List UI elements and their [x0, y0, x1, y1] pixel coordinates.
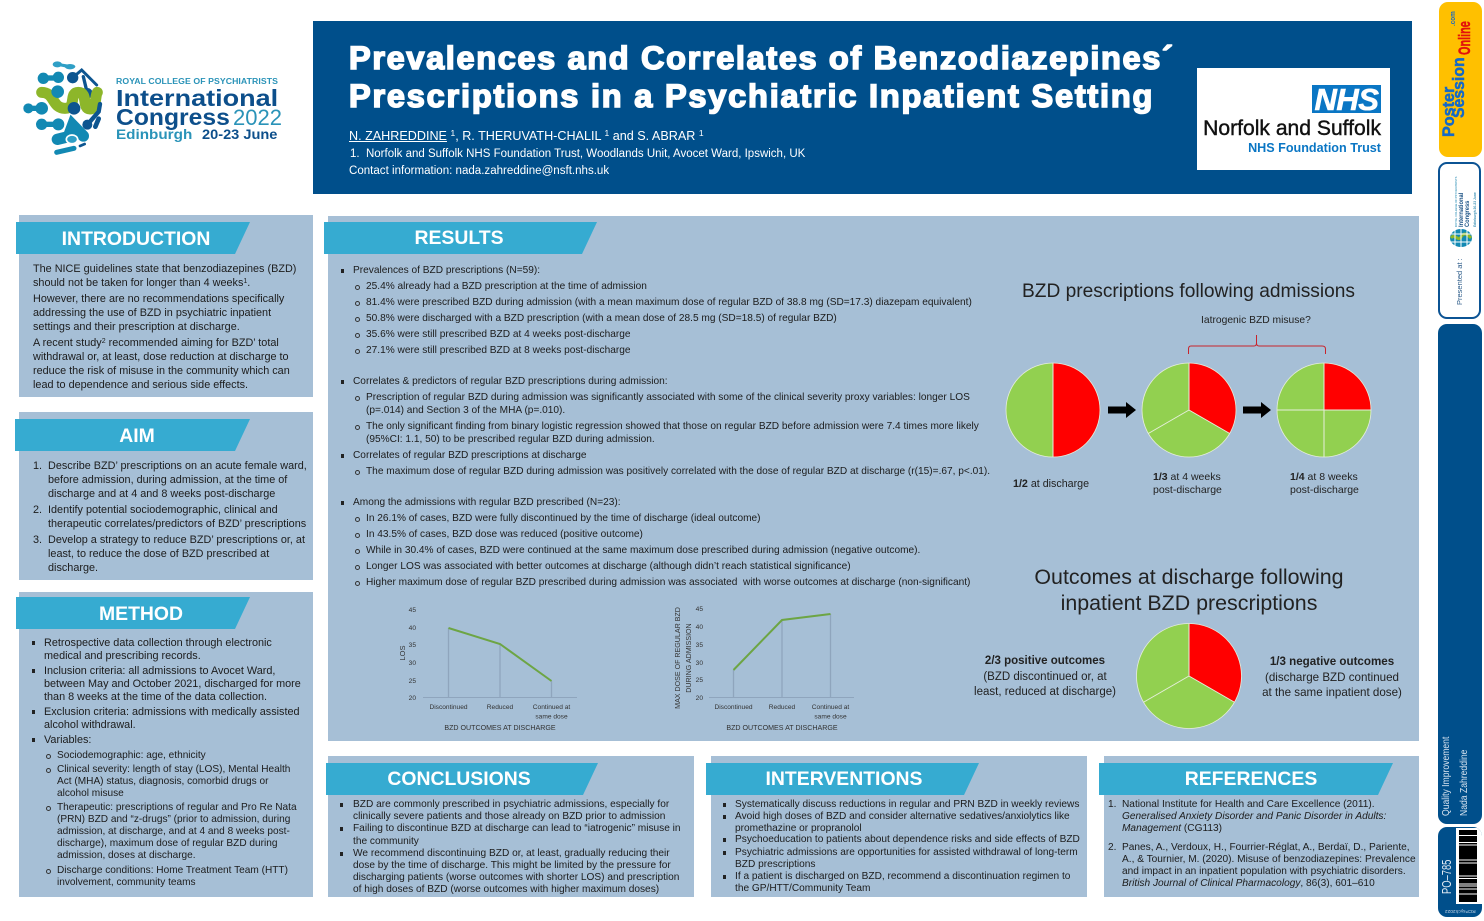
line chart: LOS by outcome: same dose: [535, 714, 568, 720]
pie label: one quarter: 1/4 at 8 weeks: [1290, 471, 1358, 483]
arrow: [1243, 402, 1271, 418]
line chart: LOS by outcome: 35: [409, 642, 416, 649]
results text: Prevalences of BZD prescriptions (N=59):: [353, 265, 540, 276]
vertical word: Session: Session: [1449, 57, 1468, 118]
results text: Correlates of regular BZD prescriptions at discharge: [353, 450, 587, 461]
pie label: one third: post-discharge: [1153, 484, 1222, 496]
results text: The only significant finding from binary logistic regression showed that those on regular BZD before admission were 7.4 times more likely: [366, 421, 979, 432]
aim list: before admission, during admission, at the time of: [48, 474, 287, 486]
conference logo: [23, 61, 282, 155]
method list: admission, doses at discharge.: [57, 850, 196, 861]
logo text: Congress: [116, 104, 230, 130]
label: negative outcomes: at the same inpatient dose): [1262, 686, 1402, 699]
heading: aim: [15, 419, 250, 451]
results text: 50.8% were discharged with a BZD prescription (with a mean dose of 28.5 mg (SD=18.5) of regular BZD): [366, 313, 837, 324]
conclusions list: the community: [353, 836, 419, 847]
interventions list: the GP/HTT/Community Team: [735, 883, 870, 894]
references list: National Institute for Health and Care Excellence (2011).: [1122, 799, 1375, 810]
heading: interventions: INTERVENTIONS: [766, 768, 922, 790]
mini congress text: [1454, 176, 1477, 227]
title banner: [313, 21, 1412, 194]
label: iatrogenic misuse: Iatrogenic BZD misuse?: [1201, 315, 1311, 326]
logo text: 2022: [233, 105, 282, 130]
pie: one third at four weeks: [1142, 362, 1236, 458]
pie: outcomes at discharge: [1136, 623, 1242, 729]
line chart: max dose by outcome: DURING ADMISSION: [685, 623, 693, 693]
line chart: max dose by outcome: Reduced: [769, 704, 796, 711]
conclusions list: of high doses of BZD (worse outcomes with higher maximum doses): [353, 884, 659, 895]
method list: Therapeutic: prescriptions of regular and Pro Re Nata: [57, 802, 297, 813]
aim list: therapeutic correlates/predictors of BZD’ prescriptions: [48, 518, 306, 530]
interventions list: promethazine or propranolol: [735, 823, 862, 834]
panel: conclusions: [328, 756, 694, 897]
method list: discharge), maximum dose of regular BZD during: [57, 838, 277, 849]
pie label: one third: [1153, 471, 1222, 496]
pie: one quarter at eight weeks: [1276, 362, 1372, 458]
heading: aim: AIM: [119, 425, 155, 447]
affiliation: 1. Norfolk and Suffolk NHS Foundation Trust, Woodlands Unit, Avocet Ward, Ipswich, UK: [350, 148, 805, 160]
heading: results: [324, 222, 597, 254]
interventions list: Psychoeducation to patients about dependence risks and side effects of BZD: [735, 834, 1080, 845]
label: positive outcomes: least, reduced at discharge): [974, 686, 1116, 698]
introduction text: settings and their prescription at discharge.: [33, 321, 240, 333]
aim list: least, to reduce the dose of BZD prescribed at: [48, 548, 269, 560]
conclusions list: [340, 799, 681, 895]
mini congress text: Edinburgh 20-23 June: [1473, 192, 1477, 227]
category text: Quality Improvement: [1441, 737, 1452, 816]
sidebar: poster number tab: [1438, 827, 1482, 917]
references list: A., & Tournier, M. (2020). Misuse of benzodiazepines: Prevalence: [1122, 854, 1416, 865]
interventions list: BZD prescriptions: [735, 859, 815, 870]
line chart: LOS by outcome: BZD OUTCOMES AT DISCHARGE: [444, 724, 556, 732]
heading: introduction: INTRODUCTION: [62, 228, 210, 250]
heading: conclusions: CONCLUSIONS: [387, 768, 531, 790]
foundation trust line: NHS Foundation Trust: [1248, 141, 1381, 155]
method list: Discharge conditions: Home Treatment Team (HTT): [57, 865, 288, 876]
line chart: max dose by outcome: Discontinued: [714, 704, 753, 711]
heading: references: [1099, 763, 1393, 795]
conclusions list: Failing to discontinue BZD at discharge can lead to “iatrogenic” misuse in: [353, 823, 681, 834]
mini congress text: International: [1459, 193, 1465, 227]
panel: aim: [19, 412, 313, 580]
line chart: LOS by outcome: LOS: [398, 645, 407, 661]
method list: medical and prescribing records.: [44, 650, 201, 662]
mini congress text: ROYAL COLLEGE OF PSYCHIATRISTS: [1454, 177, 1458, 227]
results text: In 43.5% of cases, BZD dose was reduced (positive outcome): [366, 529, 643, 540]
title: Prevalences and Correlates of Benzodiazepines´: [349, 40, 1174, 76]
presenter name: Nada Zahreddine: [1459, 750, 1470, 816]
results text: Correlates & predictors of regular BZD prescriptions during admission:: [353, 376, 668, 387]
line chart: max dose by outcome: BZD OUTCOMES AT DISCHARGE: [726, 724, 838, 732]
heading: interventions: [706, 763, 979, 795]
panel: aim: 1.: [33, 460, 42, 472]
line chart: LOS by outcome: 30: [409, 660, 416, 667]
line chart: max dose by outcome: Continued at: [812, 704, 849, 711]
references list: [1108, 799, 1416, 889]
interventions list: Avoid high doses of BZD and consider alternative sedatives/anxiolytics like: [735, 811, 1070, 822]
aim list: discharge and at 4 and 8 weeks post-discharge: [48, 488, 275, 500]
panel: references: 1.: [1108, 799, 1116, 810]
heading: outcomes at discharge: Outcomes at discharge following: [1034, 565, 1344, 589]
line chart: max dose by outcome: same dose: [814, 714, 847, 720]
line chart: max dose by outcome: [674, 606, 854, 732]
method list: involvement, community teams: [57, 877, 196, 888]
conclusions list: clinically severe patients and those already on BZD prior to admission: [353, 811, 665, 822]
panel: aim: 3.: [33, 534, 42, 546]
pie label: one quarter: [1290, 471, 1359, 496]
authors: N. ZAHREDDINE 1, R. THERUVATH-CHALIL 1 and S. ABRAR 1: [349, 128, 704, 143]
aim list: Describe BZD’ prescriptions on an acute female ward,: [48, 460, 307, 472]
introduction text: However, there are no recommendations specifically: [33, 293, 284, 305]
line chart: max dose by outcome: 45: [696, 606, 703, 613]
panel: aim: 2.: [33, 504, 42, 516]
label: positive outcomes: [974, 655, 1116, 698]
method list: Inclusion criteria: all admissions to Avocet Ward,: [44, 665, 275, 677]
contact: Contact information: nada.zahreddine@nsft.nhs.uk: [349, 165, 609, 177]
logo mark: molecule globe: [23, 61, 103, 155]
line chart: max dose by outcome: 20: [696, 695, 703, 702]
panel: references: 2.: [1108, 842, 1116, 853]
interventions list: Systematically discuss reductions in regular and PRN BZD in weekly reviews: [735, 799, 1079, 810]
interventions list: Psychiatric admissions are opportunities for assisted withdrawal of long-term: [735, 847, 1078, 858]
results text: In 26.1% of cases, BZD were fully discontinued by the time of discharge (ideal outcome): [366, 513, 761, 524]
introduction text: lead to dependence and serious side effects.: [33, 379, 248, 391]
arrow: [1108, 402, 1136, 418]
references list: and impact in an inpatient population with psychiatric disorders.: [1122, 866, 1406, 877]
presented at label: Presented at :: [1455, 258, 1464, 305]
conclusions list: discharging patients (worse outcomes with shorter LOS) and prescription: [353, 872, 679, 883]
interventions list: [723, 799, 1080, 894]
results text: 27.1% were still prescribed BZD at 8 weeks post-discharge: [366, 345, 630, 356]
results text: (p=.014) and Section 3 of the MHA (p=.010).: [366, 405, 565, 416]
label: negative outcomes: (discharge BZD continued: [1265, 670, 1399, 684]
title: [349, 40, 1174, 114]
results text: 35.6% were still prescribed BZD at 4 weeks post-discharge: [366, 329, 630, 340]
label: negative outcomes: 1/3 negative outcomes: [1270, 655, 1394, 668]
vertical word: Poster: Poster: [1439, 87, 1458, 137]
references list: Management (CG113): [1122, 823, 1222, 834]
heading: results: RESULTS: [414, 227, 504, 249]
title: Prescriptions in a Psychiatric Inpatient Setting: [349, 78, 1154, 114]
line chart: max dose by outcome: 35: [696, 642, 703, 649]
introduction text: withdrawal or, at least, dose reduction at discharge to: [33, 351, 289, 363]
line chart: max dose by outcome: 25: [696, 677, 703, 684]
vertical word: .com: .com: [1450, 11, 1457, 26]
logo text: Edinburgh: [116, 127, 192, 142]
method list: Exclusion criteria: admissions with medically assisted: [44, 706, 300, 718]
method list: [32, 637, 301, 888]
method list: (PRN) BZD and “z-drugs” (prior to admission, during: [57, 814, 290, 825]
vertical word: Online: Online: [1455, 21, 1474, 55]
bracket: [1188, 335, 1326, 354]
introduction text: should not be taken for longer than 4 weeks1.: [33, 277, 250, 289]
heading: outcomes at discharge: inpatient BZD prescriptions: [1061, 591, 1317, 615]
results text: 81.4% were prescribed BZD during admission (with a mean maximum dose of regular BZD of 38.8 mg (SD=17.3) diazepam equivalent): [366, 297, 972, 308]
interventions list: If a patient is discharged on BZD, recommend a discontinuation regimen to: [735, 871, 1070, 882]
results text: (95%CI: 1.1, 50) to be prescribed regular BZD during admission.: [366, 434, 655, 445]
pie label: one half: 1/2 at discharge: [1013, 478, 1089, 490]
method list: Act (MHA) status, diagnosis, comorbid drugs or: [57, 776, 268, 787]
aim list: Develop a strategy to reduce BZD’ prescriptions or, at: [48, 534, 305, 546]
pie label: one third: 1/3 at 4 weeks: [1153, 471, 1221, 483]
label: positive outcomes: 2/3 positive outcomes: [985, 655, 1105, 667]
heading: outcomes at discharge: [1034, 565, 1344, 615]
NHS trust logo: [1197, 68, 1390, 170]
aim list: [33, 460, 307, 574]
introduction text: [33, 263, 296, 391]
line chart: LOS by outcome: Continued at: [533, 704, 570, 711]
line chart: max dose by outcome: 30: [696, 660, 703, 667]
method list: than 8 weeks at the time of the data collection.: [44, 691, 267, 703]
pie label: one quarter: post-discharge: [1290, 484, 1359, 496]
panel: results: [328, 216, 1419, 741]
mini congress logo: [1450, 229, 1472, 247]
panel: introduction: [19, 215, 313, 397]
results text: Prescription of regular BZD during admission was significantly associated with some of the clinical severity proxy variables: longer LOS: [366, 392, 970, 403]
logo text: 20-23 June: [202, 127, 277, 142]
conclusions list: dose by the time of discharge. This might be limited by the pressure for: [353, 860, 671, 871]
method list: alcohol withdrawal.: [44, 719, 136, 731]
trust name: Norfolk and Suffolk: [1203, 117, 1381, 140]
results text: Among the admissions with regular BZD prescribed (N=23):: [353, 497, 621, 508]
results text: Longer LOS was associated with better outcomes at discharge (although didn’t reach statistical significance): [366, 561, 851, 572]
sidebar: poster session online tab: [1439, 2, 1482, 157]
heading: BZD prescriptions following admissions: BZD prescriptions following admissions: [1022, 281, 1355, 302]
panel: interventions: [711, 756, 1087, 897]
line chart: LOS by outcome: 20: [409, 695, 416, 702]
introduction text: reduce the risk of misuse in the community which can: [33, 365, 290, 377]
conclusions list: We recommend discontinuing BZD or, at least, gradually reducing their: [353, 848, 670, 859]
introduction text: The NICE guidelines state that benzodiazepines (BZD): [33, 263, 296, 275]
results text: [341, 265, 990, 588]
panel: references: [1104, 756, 1419, 897]
logo text: ROYAL COLLEGE OF PSYCHIATRISTS: [116, 76, 278, 86]
small footer code: RCPsych2022: [1445, 908, 1476, 913]
references list: British Journal of Clinical Pharmacology, 86(3), 601–610: [1122, 878, 1375, 889]
introduction text: addressing the use of BZD in psychiatric inpatient: [33, 307, 271, 319]
method list: Clinical severity: length of stay (LOS), Mental Health: [57, 764, 290, 775]
heading: references: REFERENCES: [1185, 768, 1317, 790]
mini congress text: Congress: [1465, 201, 1471, 227]
method list: admission, at discharge, and at 4 and 8 weeks post-: [57, 826, 290, 837]
line chart: LOS by outcome: [398, 607, 577, 732]
references list: Panes, A., Verdoux, H., Fourrier-Réglat, A., Berdaï, D., Pariente,: [1122, 842, 1410, 853]
barcode: [1456, 828, 1482, 904]
method list: Sociodemographic: age, ethnicity: [57, 750, 206, 761]
method list: between May and October 2021, discharged for more: [44, 678, 301, 690]
label: positive outcomes: (BZD discontinued or, at: [983, 670, 1107, 682]
method list: alcohol misuse: [57, 788, 124, 799]
line chart: LOS by outcome: Reduced: [487, 704, 514, 711]
line chart: max dose by outcome: 40: [696, 624, 703, 631]
poster number: PO–785: [1440, 860, 1454, 894]
logo text: [116, 76, 282, 142]
sidebar: presented at tab: [1438, 162, 1481, 319]
references list: Generalised Anxiety Disorder and Panic Disorder in Adults:: [1122, 811, 1386, 822]
conclusions list: BZD are commonly prescribed in psychiatric admissions, especially for: [353, 799, 669, 810]
sidebar: category tab: [1438, 324, 1482, 824]
label: negative outcomes: [1262, 655, 1402, 699]
results text: The maximum dose of regular BZD during admission was positively correlated with the dose of regular BZD at discharge (r(15)=.67, p<.01).: [366, 466, 990, 477]
panel: method: [19, 592, 313, 897]
heading: method: [16, 597, 250, 629]
heading: method: METHOD: [99, 603, 183, 625]
line chart: LOS by outcome: 45: [409, 607, 416, 614]
method list: Retrospective data collection through electronic: [44, 637, 272, 649]
results text: 25.4% already had a BZD prescription at the time of admission: [366, 281, 647, 292]
NHS lozenge: NHS: [1315, 82, 1378, 117]
heading: conclusions: [326, 763, 598, 795]
line chart: max dose by outcome: MAX DOSE OF REGULAR BZD: [674, 607, 682, 709]
introduction text: A recent study2 recommended aiming for BZD’ total: [33, 337, 279, 349]
line chart: LOS by outcome: 40: [409, 625, 416, 632]
aim list: Identify potential sociodemographic, clinical and: [48, 504, 278, 516]
results text: While in 30.4% of cases, BZD were continued at the same maximum dose prescribed during admission (negative outcome).: [366, 545, 920, 556]
method list: Variables:: [44, 734, 91, 746]
pie: one half at discharge: [1006, 362, 1100, 458]
results text: Higher maximum dose of regular BZD prescribed during admission was associated with worse outcomes at discharge (non-significant): [366, 577, 970, 588]
logo text: International: [116, 85, 278, 111]
line chart: LOS by outcome: 25: [409, 678, 416, 685]
heading: introduction: [16, 222, 250, 254]
aim list: discharge.: [48, 562, 98, 574]
line chart: LOS by outcome: Discontinued: [429, 704, 468, 711]
